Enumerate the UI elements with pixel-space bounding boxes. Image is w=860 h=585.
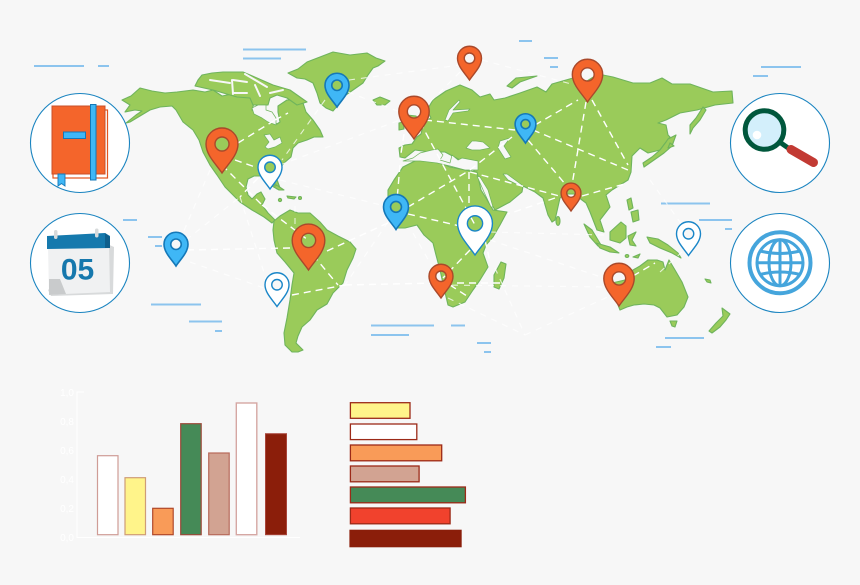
pin: southern africa orange <box>429 264 453 298</box>
bar chart: horizontal <box>350 403 465 547</box>
iceland <box>373 97 390 105</box>
faint route lines <box>180 60 682 335</box>
asian islands <box>556 107 706 258</box>
pin: south america orange <box>292 224 325 270</box>
pin: siberia orange <box>572 59 603 102</box>
arctic channels <box>210 74 283 96</box>
icon: globe <box>730 214 830 312</box>
pin: europe orange <box>399 96 429 139</box>
eurasia <box>399 75 733 232</box>
chart axes: 0,2 <box>60 504 74 515</box>
oceania islands <box>670 279 730 333</box>
australia <box>612 260 688 317</box>
pin: ocean blue <box>164 232 188 266</box>
british isles <box>406 115 420 128</box>
pin: arctic orange <box>458 46 482 80</box>
pin: south asia orange <box>561 183 581 211</box>
pin: pacific coast white <box>265 273 289 306</box>
pin: central asia blue <box>515 114 536 143</box>
south america <box>273 210 356 352</box>
caribbean islands <box>270 183 302 202</box>
pin: west africa blue <box>384 194 408 230</box>
chart axes: 0,0 <box>60 533 74 544</box>
chart axes: 0,6 <box>60 446 74 457</box>
decorative blue dashes <box>34 41 801 352</box>
route network <box>180 60 682 335</box>
icon: calendar <box>30 214 130 312</box>
pin: florida white <box>258 155 282 189</box>
africa <box>388 160 507 307</box>
calendar date: 05 <box>61 254 94 286</box>
world map <box>122 46 733 352</box>
ireland <box>399 122 404 130</box>
greenland <box>288 52 385 111</box>
madagascar <box>494 262 506 289</box>
pin: australia orange <box>604 263 634 306</box>
novaya zemlya <box>507 76 537 88</box>
pin: north america orange <box>206 128 238 173</box>
chart axes: 0,4 <box>60 475 74 486</box>
bar chart: vertical <box>60 388 300 544</box>
arctic islands <box>195 72 307 105</box>
north america <box>122 88 323 223</box>
landmasses <box>122 52 733 352</box>
inland seas <box>252 100 522 207</box>
chart axes: 1,0 <box>60 388 74 399</box>
strong route lines <box>186 100 655 298</box>
chart axes: 0,8 <box>60 417 74 428</box>
pin: pacific white <box>676 222 700 256</box>
icon: notebook <box>30 94 130 192</box>
pin: greenland blue <box>325 73 349 107</box>
chart axes <box>60 388 300 544</box>
icon: magnifying glass <box>730 94 830 192</box>
pin: east africa white <box>458 206 492 255</box>
